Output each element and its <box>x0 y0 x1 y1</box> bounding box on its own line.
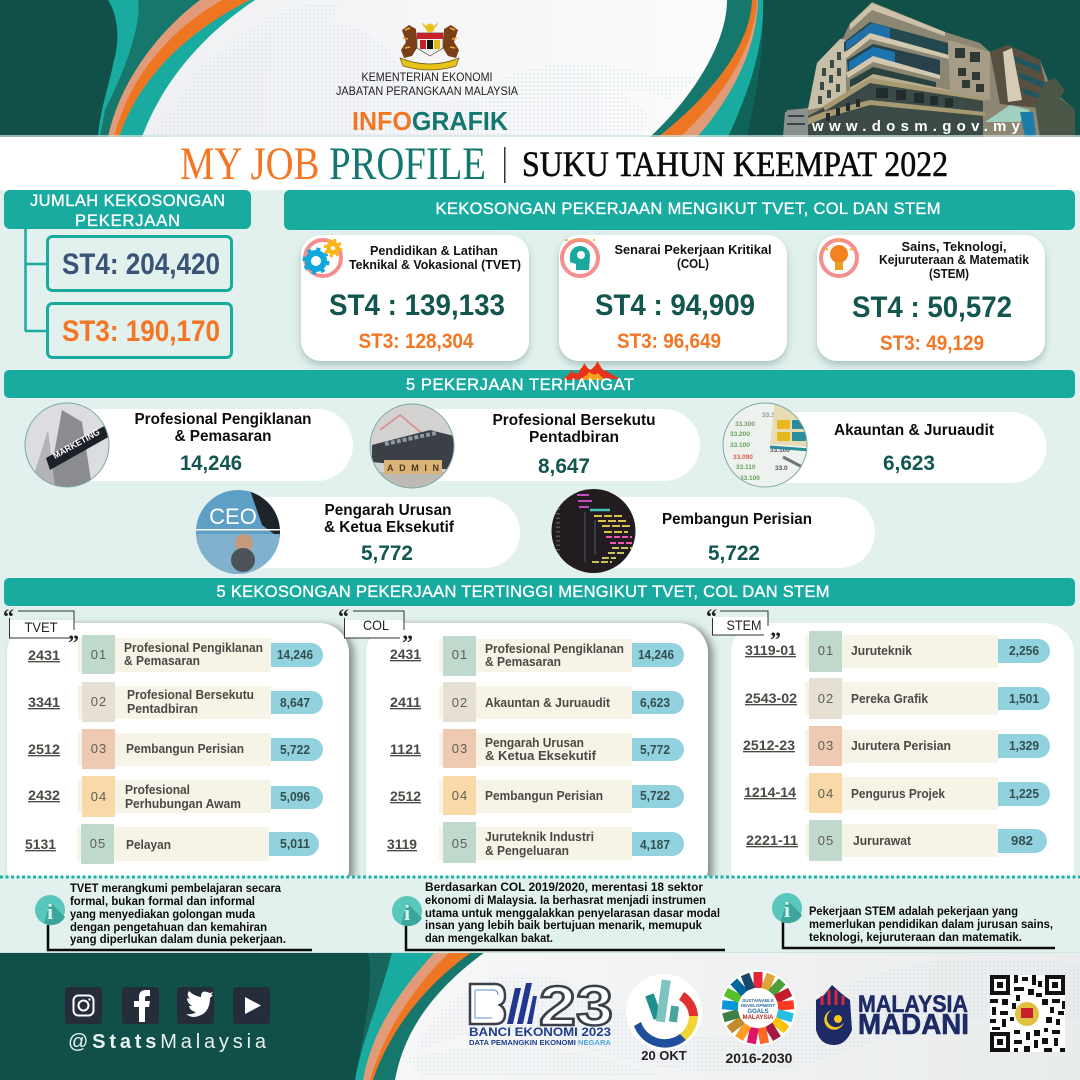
card: STEM: (STEM) <box>929 266 969 281</box>
row 5: 5131 <box>25 837 56 852</box>
row 4: 04 <box>91 789 107 804</box>
row 2 <box>390 682 684 722</box>
job card: marketing: 14,246 <box>180 452 242 475</box>
title band <box>0 137 1080 190</box>
row 4: Pengurus Projek <box>851 787 945 801</box>
header banner <box>0 0 1080 137</box>
job card: marketing: Profesional Pengiklanan <box>134 411 312 428</box>
row 5: 982 <box>1011 834 1033 848</box>
photo: CEO <box>196 490 282 574</box>
row 2: 2543-02 <box>745 691 797 706</box>
tag: COL: COL <box>363 617 389 633</box>
social: instagram <box>65 987 102 1024</box>
row 5: 2221-11 <box>746 833 799 848</box>
note: STEM: memerlukan pendidikan dalam jurusan sains, <box>809 919 1053 931</box>
logo: statistics day <box>626 974 702 1063</box>
note: TVET: TVET merangkumi pembelajaran secara <box>70 883 282 895</box>
icon: light bulb <box>821 238 857 276</box>
row 3: 1121 <box>390 742 422 757</box>
row 5 <box>746 820 1047 861</box>
job card: developer: Pembangun Perisian <box>662 511 812 528</box>
photo: accounting <box>723 403 810 487</box>
note: STEM: teknologi, kejuruteraan dan matematik. <box>809 932 1022 944</box>
job card: admin <box>370 404 700 488</box>
photo: accounting: 33.200 <box>730 431 750 438</box>
logo: SDG wheel: DEVELOPMENT <box>741 1003 775 1008</box>
row 2: 8,647 <box>280 696 310 710</box>
tag: STEM: ” <box>770 627 781 652</box>
logo: SDG wheel: MALAYSIA <box>743 1015 774 1021</box>
logo: SDG wheel: 2016-2030 <box>726 1050 793 1066</box>
row 1: 14,246 <box>638 648 674 662</box>
logo: Banci Ekonomi 2023: 23 <box>539 974 613 1037</box>
row 3: Pembangun Perisian <box>126 742 244 756</box>
heading: TVET COL STEM vacancies <box>284 190 1075 230</box>
QR code <box>990 975 1065 1052</box>
row 1: & Pemasaran <box>485 655 561 669</box>
card: STEM: Sains, Teknologi, <box>902 239 1006 254</box>
photo: accounting: 33.300 <box>762 412 782 419</box>
row 5 <box>25 824 319 864</box>
note: COL: utama untuk menggalakkan penyelarasan dasar modal <box>425 908 720 920</box>
job card: admin: 8,647 <box>538 455 590 478</box>
row 1: Profesional Pengiklanan <box>124 641 263 655</box>
row 5: 5,011 <box>280 837 310 851</box>
card: TVET <box>301 235 529 361</box>
row 3: 1,329 <box>1009 739 1039 753</box>
note: TVET: dengan pengetahuan dan kemahiran <box>70 922 267 934</box>
row 3: 03 <box>818 738 834 753</box>
note: TVET: yang menyediakan golongan muda <box>70 909 256 921</box>
ST4 total: ST4: 204,420 <box>62 248 220 281</box>
row 1: 2431 <box>390 647 421 662</box>
panel: total vacancies <box>4 190 251 358</box>
logo: Malaysia Madani: MADANI <box>858 1009 969 1041</box>
row 3 <box>28 729 323 769</box>
logo: Malaysia Madani <box>816 985 969 1045</box>
website: www.dosm.gov.my <box>811 118 1021 135</box>
row 2 <box>745 678 1050 719</box>
card: STEM: ST3: 49,129 <box>880 332 984 355</box>
social: facebook <box>122 987 159 1024</box>
footnote band <box>0 876 1080 952</box>
row 1: 01 <box>91 647 107 662</box>
heading: total vacancies: JUMLAH KEKOSONGAN <box>30 192 225 210</box>
row 3: 5,722 <box>280 743 310 757</box>
row 1 <box>390 636 684 676</box>
row 3: Jurutera Perisian <box>851 739 951 753</box>
card: COL <box>559 235 787 361</box>
row 3 <box>743 726 1050 766</box>
heading: TVET COL STEM vacancies: KEKOSONGAN PEKERJAAN MENGIKUT TVET, COL DAN STEM <box>436 200 940 218</box>
row 1: 01 <box>818 643 834 658</box>
heading: total vacancies: PEKERJAAN <box>75 212 180 230</box>
row 4 <box>28 776 323 817</box>
social: twitter <box>177 987 214 1024</box>
icon: info: i <box>784 897 790 922</box>
ministry name <box>336 72 518 98</box>
job card: accountant: 6,623 <box>883 452 935 475</box>
row 3: 2512-23 <box>743 738 796 753</box>
tag: TVET: ” <box>68 630 79 655</box>
photo: accounting: 33.100 <box>770 447 790 454</box>
infografik label: INFOGRAFIK <box>352 106 508 136</box>
row 1: 2431 <box>28 648 61 663</box>
card: COL: (COL) <box>677 256 709 271</box>
note: COL: dan mengekalkan bakat. <box>425 933 553 945</box>
social: youtube <box>233 987 270 1024</box>
tag: STEM: STEM <box>726 617 762 633</box>
row 5: 3119 <box>387 837 417 852</box>
tag: COL: ” <box>402 630 413 655</box>
photo: accounting: 33.100 <box>730 442 750 449</box>
card: COL: ST4 : 94,909 <box>595 289 755 322</box>
photo: accounting: 33.090 <box>733 454 753 461</box>
job card: accountant <box>723 403 1046 487</box>
row 1: Juruteknik <box>851 644 912 658</box>
note: COL: ekonomi di Malaysia. Ia berhasrat menjadi instrumen <box>425 895 706 907</box>
photo: accounting: 33.0 <box>775 465 788 472</box>
card: TVET: Pendidikan & Latihan <box>370 243 498 258</box>
note: STEM: Pekerjaan STEM adalah pekerjaan yang <box>809 906 1018 918</box>
ST4 total <box>48 236 232 290</box>
icon: info <box>392 896 422 926</box>
row 2: 02 <box>818 691 834 706</box>
tag: STEM <box>706 604 781 652</box>
tag: COL: “ <box>338 604 349 629</box>
row 4: Pembangun Perisian <box>485 789 603 803</box>
job card: marketing <box>25 403 353 487</box>
card: STEM <box>817 235 1045 361</box>
photo: accounting: 33.110 <box>736 464 756 471</box>
ministry name: KEMENTERIAN EKONOMI <box>362 72 492 84</box>
row 2: 02 <box>452 695 468 710</box>
row 3: 03 <box>452 741 468 756</box>
ST3 total: ST3: 190,170 <box>62 315 220 348</box>
photo: marketing <box>25 403 110 487</box>
row 2: Pereka Grafik <box>851 692 928 706</box>
row 3: 03 <box>91 741 107 756</box>
tag: STEM: “ <box>706 604 717 629</box>
tag: TVET <box>3 604 79 655</box>
row 3: 5,772 <box>640 743 670 757</box>
row 5: 4,187 <box>640 838 670 852</box>
job card: CEO <box>196 490 520 574</box>
note: STEM <box>772 893 1055 948</box>
photo: admin <box>370 404 454 488</box>
row 2: 3341 <box>28 695 61 710</box>
row 2: 2411 <box>390 695 422 710</box>
footer band <box>0 952 1080 1080</box>
logo: Banci Ekonomi 2023 <box>469 974 613 1047</box>
row 4: Perhubungan Awam <box>125 797 241 811</box>
icon: info <box>772 893 802 923</box>
row 5 <box>387 822 684 863</box>
row 3: 2512 <box>28 742 60 757</box>
logo: Banci Ekonomi 2023: BANCI EKONOMI 2023 <box>469 1025 611 1039</box>
logo: SDG wheel <box>720 970 796 1066</box>
note: TVET: yang diperlukan dalam dunia pekerjaan. <box>70 934 286 946</box>
row 2: 6,623 <box>640 696 670 710</box>
row 1 <box>745 631 1050 672</box>
job card: developer: 5,722 <box>708 542 760 565</box>
row 4: 2512 <box>390 789 421 804</box>
icon: info: i <box>47 899 53 924</box>
icon: info <box>35 895 65 925</box>
card: STEM: ST4 : 50,572 <box>852 291 1012 324</box>
photo: accounting: 33.100 <box>740 475 760 482</box>
logo: SDG wheel: SUSTAINABLE <box>742 998 774 1003</box>
ST3 total <box>48 304 232 358</box>
photo: admin: ADMIN <box>387 463 439 473</box>
logo: Banci Ekonomi 2023: DATA PEMANGKIN EKONOMI NEGARA <box>469 1038 612 1047</box>
panel: STEM list <box>706 604 1074 898</box>
job card: CEO: Pengarah Urusan <box>324 502 452 519</box>
row 5: & Pengeluaran <box>485 844 569 858</box>
row 1: & Pemasaran <box>124 654 200 668</box>
job card: developer <box>551 489 875 573</box>
row 2: Profesional Bersekutu <box>127 688 254 702</box>
job card: CEO: 5,772 <box>361 542 413 565</box>
icon: building photo <box>0 2 1080 137</box>
job card: CEO: & Ketua Eksekutif <box>324 519 455 536</box>
row 4 <box>390 776 684 815</box>
logo: Malaysia Madani: MALAYSIA <box>858 991 968 1018</box>
row 2: Pentadbiran <box>127 702 198 716</box>
note: COL: Berdasarkan COL 2019/2020, merentasi 18 sektor <box>425 882 704 894</box>
row 5: 05 <box>818 833 834 848</box>
card: TVET: Teknikal & Vokasional (TVET) <box>349 257 521 272</box>
photo: CEO: CEO <box>209 504 257 529</box>
row 5: 05 <box>90 836 106 851</box>
row 4: Profesional <box>125 783 190 797</box>
row 1: 3119-01 <box>745 643 796 658</box>
heading: top 5 vacancies <box>4 578 1075 606</box>
row 1: Profesional Pengiklanan <box>485 642 624 656</box>
card: COL: Senarai Pekerjaan Kritikal <box>614 242 772 257</box>
row 1: 14,246 <box>277 648 313 662</box>
row 2: Akauntan & Juruaudit <box>485 696 611 710</box>
row 1: 01 <box>452 647 468 662</box>
photo: accounting: 33.300 <box>735 421 755 428</box>
heading: hottest jobs: 5 PEKERJAAN TERHANGAT <box>406 376 634 394</box>
panel: TVET list <box>3 604 349 898</box>
logo: statistics day: 20 OKT <box>641 1048 687 1063</box>
note: COL: insan yang lebih baik bertujuan menarik, memupuk <box>425 920 703 932</box>
logo: SDG wheel: GOALS <box>747 1009 769 1015</box>
card: TVET: ST3: 128,304 <box>358 330 474 353</box>
title band: SUKU TAHUN KEEMPAT 2022 <box>522 144 948 184</box>
note: COL <box>392 882 725 950</box>
row 4: 5,722 <box>640 789 670 803</box>
row 4: 2432 <box>28 788 60 803</box>
row 1: 2,256 <box>1009 644 1039 658</box>
row 3 <box>390 729 684 768</box>
row 2: 1,501 <box>1009 692 1039 706</box>
row 4: 04 <box>818 786 834 801</box>
card: TVET: ST4 : 139,133 <box>329 289 505 322</box>
icon: info: i <box>404 900 410 925</box>
note: TVET: formal, bukan formal dan informal <box>70 896 255 908</box>
icon: head <box>562 240 598 276</box>
row 5: Juruteknik Industri <box>485 830 594 844</box>
row 4: 5,096 <box>280 790 310 804</box>
row 5: Pelayan <box>126 838 171 852</box>
tag: TVET: “ <box>3 604 14 629</box>
heading: total vacancies <box>4 190 251 230</box>
job card: admin: Profesional Bersekutu <box>492 412 656 429</box>
row 4: 1,225 <box>1009 787 1039 801</box>
heading: top 5 vacancies: 5 KEKOSONGAN PEKERJAAN TERTINGGI MENGIKUT TVET, COL DAN STEM <box>216 583 830 601</box>
note: TVET <box>35 883 312 950</box>
photo: code <box>551 489 636 573</box>
job card: admin: Pentadbiran <box>529 429 619 446</box>
icon: gears <box>304 240 341 276</box>
heading: hottest jobs <box>4 361 1075 398</box>
photo: marketing: MARKETING <box>51 427 101 461</box>
panel: COL list <box>338 604 708 898</box>
ministry name: JABATAN PERANGKAAN MALAYSIA <box>336 86 518 98</box>
row 2: 02 <box>91 694 107 709</box>
row 2 <box>28 682 323 722</box>
icon: national crest <box>400 22 459 70</box>
row 3: & Ketua Eksekutif <box>485 749 597 763</box>
social handle: @StatsMalaysia <box>68 1031 267 1053</box>
row 1 <box>28 635 323 674</box>
card: COL: ST3: 96,649 <box>617 330 721 353</box>
row 5: Jururawat <box>853 834 912 848</box>
row 4: 04 <box>452 788 468 803</box>
title band: MY JOB PROFILE <box>180 138 486 190</box>
job card: accountant: Akauntan & Juruaudit <box>834 422 994 439</box>
row 3: Pengarah Urusan <box>485 736 584 750</box>
row 5: 05 <box>452 836 468 851</box>
card: STEM: Kejuruteraan & Matematik <box>879 252 1030 267</box>
row 4 <box>744 773 1050 813</box>
job card: marketing: & Pemasaran <box>174 428 272 445</box>
tag: TVET: TVET <box>24 619 58 635</box>
icon: flames <box>563 361 621 380</box>
row 4: 1214-14 <box>744 785 797 800</box>
tag: COL <box>338 604 413 655</box>
